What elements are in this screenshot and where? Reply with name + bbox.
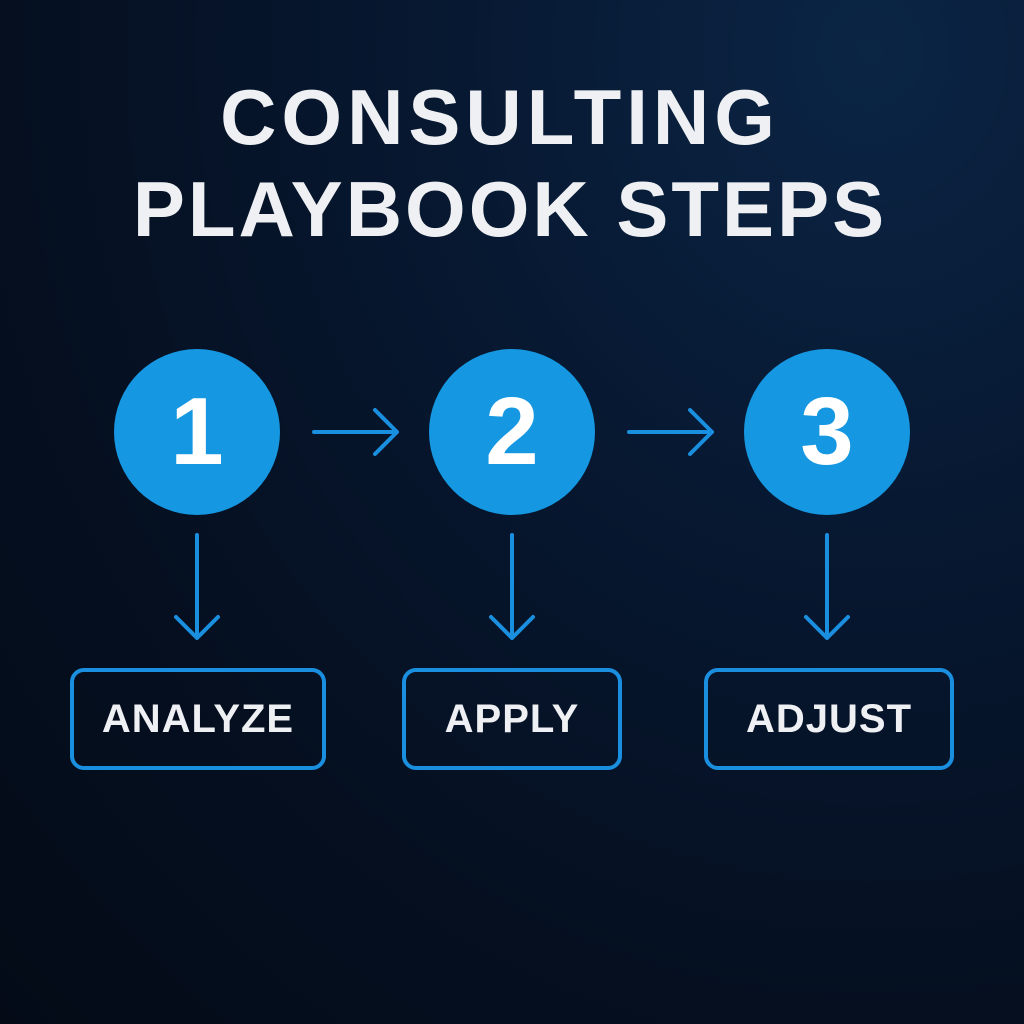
arrow: 2 down bbox=[491, 535, 533, 638]
arrow: 3 down bbox=[806, 535, 848, 638]
box: adjust: ADJUST bbox=[746, 697, 912, 741]
step 2 circle: 2 bbox=[485, 378, 539, 485]
step 3 circle: 3 bbox=[800, 378, 854, 485]
arrow: 2 to 3 bbox=[629, 410, 712, 454]
box: apply: APPLY bbox=[445, 697, 579, 741]
title bbox=[133, 73, 887, 253]
step 1 circle bbox=[114, 349, 280, 515]
box: analyze: ANALYZE bbox=[102, 697, 294, 741]
step 2 circle bbox=[429, 349, 595, 515]
title: PLAYBOOK STEPS bbox=[133, 165, 887, 253]
box: adjust bbox=[704, 668, 954, 770]
box: apply bbox=[402, 668, 622, 770]
arrow: 1 down bbox=[176, 535, 218, 638]
box: analyze bbox=[70, 668, 326, 770]
step 1 circle: 1 bbox=[170, 378, 224, 485]
arrow: 1 to 2 bbox=[314, 410, 397, 454]
step 3 circle bbox=[744, 349, 910, 515]
title: CONSULTING bbox=[220, 73, 780, 161]
